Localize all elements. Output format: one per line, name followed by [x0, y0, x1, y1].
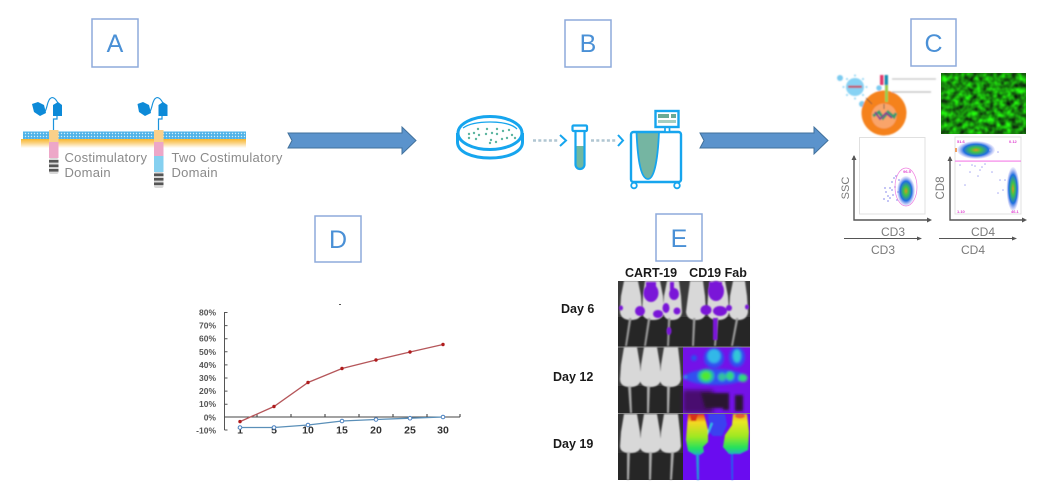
- flow plot: SSC vs CD3: [860, 138, 925, 214]
- y axis labels: 80%: [199, 308, 216, 318]
- axes: SSC vs CD3: [844, 155, 932, 240]
- axis labels: [840, 176, 995, 257]
- y axis labels: 0%: [204, 412, 216, 422]
- icon: petri dish: [458, 116, 522, 158]
- axis labels: SSC: [840, 177, 852, 199]
- mice silhouettes: [620, 281, 748, 480]
- y axis labels: [196, 308, 216, 435]
- y axis labels: 40%: [199, 360, 216, 370]
- image background: [618, 281, 750, 480]
- label box E: [656, 214, 702, 261]
- series: red line: [238, 343, 445, 423]
- arrow B to C: [700, 127, 828, 154]
- label box C: C: [924, 30, 943, 58]
- label box B: [565, 20, 611, 67]
- row 3 mice: [620, 414, 681, 480]
- panel C: CAR-T characterization: [837, 73, 1027, 257]
- icon: test tube: [572, 126, 587, 169]
- axis labels: CD8: [935, 176, 947, 200]
- x axis labels: 5: [271, 424, 277, 436]
- row labels: Day 6: [561, 302, 594, 316]
- text: costimulatory domain: Costimulatory: [64, 150, 147, 165]
- dotted arrow: dish to tube: [533, 135, 566, 146]
- small tick mark: [339, 304, 341, 305]
- y axis labels: 30%: [199, 373, 216, 383]
- row 1 mice: [620, 281, 748, 346]
- panel D: line chart: [196, 304, 460, 436]
- panel B: cell culture process: [458, 111, 681, 188]
- flow plot: CD8 vs CD4: [955, 137, 1021, 214]
- column headers: [625, 266, 747, 280]
- text: two costimulatory domain: Domain: [172, 165, 218, 180]
- flow plot: CD8 vs CD4: 46.1: [1011, 209, 1020, 214]
- icon: bioreactor: [631, 111, 681, 188]
- row 1 purple signal: [619, 281, 749, 340]
- x axis labels: 10: [302, 424, 314, 436]
- axis labels: CD3: [871, 243, 895, 257]
- label box D: D: [329, 226, 347, 254]
- axes: CD8 vs CD4: [939, 156, 1027, 240]
- label box B: B: [580, 30, 596, 58]
- label box E: E: [671, 225, 687, 253]
- y axis: [224, 312, 228, 430]
- label box D: [315, 216, 361, 262]
- row labels: [553, 302, 594, 451]
- axis labels: CD4: [971, 225, 995, 239]
- text: costimulatory domain: Domain: [64, 165, 111, 180]
- label box C: [911, 19, 956, 66]
- row 2 mice: [620, 347, 681, 413]
- x axis labels: [237, 424, 449, 436]
- row 3 heat map: [683, 414, 750, 480]
- column headers: CART-19: [625, 266, 677, 280]
- y axis labels: -10%: [196, 425, 216, 435]
- x axis labels: 15: [336, 424, 348, 436]
- row 2 heat map: [683, 347, 750, 413]
- receptor: costimulatory domain: [32, 98, 62, 174]
- y axis labels: 10%: [199, 399, 216, 409]
- y axis labels: 60%: [199, 334, 216, 344]
- panel E: mouse bioluminescence imaging: [553, 266, 750, 480]
- x axis labels: 1: [237, 424, 243, 436]
- flow plot: SSC vs CD3: 96.5: [903, 169, 912, 174]
- y axis labels: 20%: [199, 386, 216, 396]
- panel A: CAR constructs on membrane: [21, 98, 283, 188]
- dotted arrow: tube to bioreactor: [591, 135, 623, 146]
- axis labels: CD3: [881, 225, 905, 239]
- text: two costimulatory domain: Two Costimulatory: [172, 150, 283, 165]
- flow plot: CD8 vs CD4: 51.6: [957, 139, 966, 144]
- image: green fluorescence micrograph: [941, 73, 1026, 134]
- flow plot: CD8 vs CD4: 1.10: [957, 209, 966, 214]
- row labels: Day 19: [553, 437, 593, 451]
- x axis labels: 30: [437, 424, 449, 436]
- axis labels: CD4: [961, 243, 985, 257]
- label box A: [92, 19, 138, 67]
- receptor: two costimulatory domains: [138, 98, 168, 188]
- row labels: Day 12: [553, 370, 593, 384]
- row dividers: [618, 347, 750, 414]
- x axis: [224, 414, 460, 417]
- series: blue line: [238, 415, 445, 429]
- column headers: CD19 Fab: [689, 266, 747, 280]
- y axis labels: 70%: [199, 321, 216, 331]
- x axis labels: 25: [404, 424, 416, 436]
- cell membrane: [21, 132, 246, 148]
- arrow A to B: [288, 127, 416, 154]
- flow plot: CD8 vs CD4: 0.12: [1009, 139, 1018, 144]
- icon: lentiviral transduction diagram: [837, 74, 936, 136]
- x axis labels: 20: [370, 424, 382, 436]
- y axis labels: 50%: [199, 347, 216, 357]
- label box A: A: [107, 30, 124, 58]
